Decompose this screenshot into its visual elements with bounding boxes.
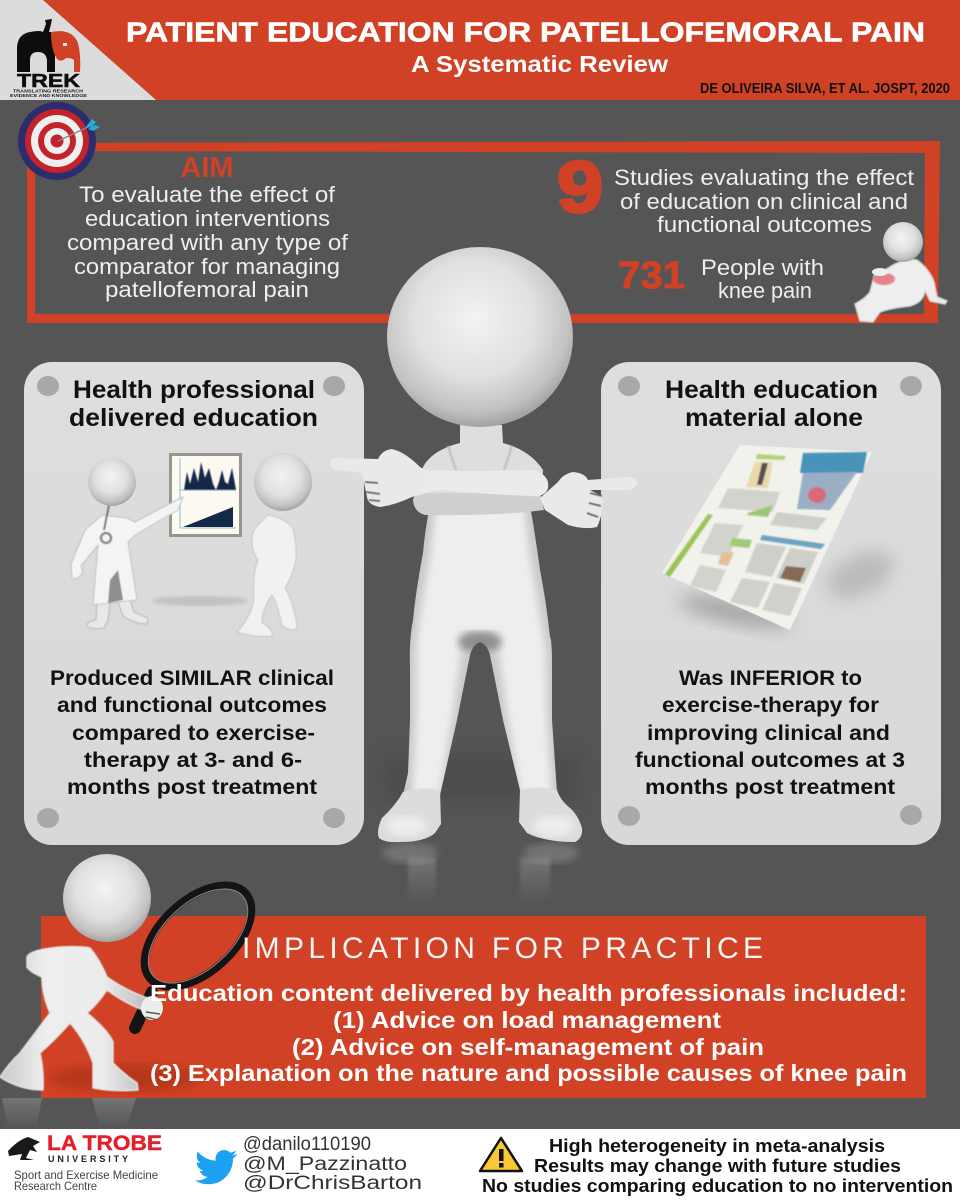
- patient: [237, 453, 312, 636]
- panel body text: therapy at 3- and 6-: [84, 749, 302, 772]
- floor shadow and reflection: [382, 755, 580, 902]
- right pointing hand: [540, 472, 637, 528]
- logo: TREK elephant: TREK: [17, 71, 80, 91]
- reflection: [2, 1098, 136, 1128]
- panel text: (2) Advice on self-management of pain: [292, 1034, 764, 1060]
- panel body text: [635, 667, 905, 799]
- caveats text: Results may change with future studies: [534, 1156, 901, 1176]
- logo: La Trobe University: UNIVERSITY: [48, 1154, 128, 1164]
- logo: La Trobe University: LA TROBE: [47, 1132, 162, 1155]
- legs and torso: [403, 505, 557, 795]
- stat: 731 people: [618, 255, 824, 303]
- subtitle: A Systematic Review: [411, 51, 668, 77]
- panel heading: [665, 376, 878, 432]
- title: PATIENT EDUCATION FOR PATELLOFEMORAL PAIN: [126, 16, 925, 48]
- crossed arms: [413, 470, 548, 515]
- caveats text: [482, 1136, 953, 1196]
- aim text: patellofemoral pain: [105, 277, 309, 302]
- illustration: patient education leaflet: [662, 445, 901, 635]
- panel body text: Was INFERIOR to: [679, 667, 862, 690]
- stat: 731 people: 731: [618, 255, 685, 297]
- magnifying glass: [126, 866, 270, 1028]
- chart board: [169, 453, 242, 537]
- illustration: doctor presenting chart to patient: [71, 453, 312, 636]
- aim text: compared with any type of: [67, 230, 349, 255]
- panel heading: Health education: [665, 376, 878, 404]
- stat: 9 studies: Studies evaluating the effect: [614, 165, 914, 190]
- stat: 9 studies: functional outcomes: [657, 212, 872, 237]
- panel: aim and study summary: [18, 102, 947, 323]
- panel heading: Health professional: [73, 376, 315, 404]
- panel: health education material alone: [601, 362, 941, 845]
- panel: implication for practice: [0, 854, 926, 1128]
- stat: 731 people: knee pain: [718, 278, 812, 303]
- aim heading: AIM: [180, 152, 234, 184]
- panel body text: months post treatment: [67, 776, 317, 799]
- panel heading: delivered education: [69, 404, 318, 432]
- aim text: To evaluate the effect of: [79, 182, 336, 207]
- left pointing hand: [330, 449, 430, 507]
- stat: 9 studies: [557, 148, 914, 237]
- panel body text: and functional outcomes: [57, 694, 327, 717]
- logo: TREK elephant: EVIDENCE AND KNOWLEDGE: [10, 93, 87, 98]
- aim text: comparator for managing: [74, 254, 340, 279]
- panel text: (1) Advice on load management: [333, 1007, 721, 1033]
- doctor: [71, 497, 183, 629]
- logo: TREK elephant: TRANSLATING RESEARCH: [13, 88, 83, 94]
- panel: health professional delivered education: [24, 362, 364, 845]
- panel heading: [69, 376, 318, 432]
- figure: [0, 947, 147, 1091]
- panel body text: exercise-therapy for: [662, 694, 879, 717]
- panel heading: IMPLICATION FOR PRACTICE: [242, 932, 763, 965]
- icon: target: [18, 102, 100, 180]
- logo: La Trobe University: [8, 1132, 162, 1193]
- caveats text: High heterogeneity in meta-analysis: [549, 1136, 885, 1156]
- panel text: [150, 980, 907, 1086]
- twitter handles: @DrChrisBarton: [243, 1173, 422, 1194]
- twitter handles: @danilo110190: [243, 1134, 371, 1155]
- central figure pointing both ways: [330, 247, 637, 902]
- panel text: (3) Explanation on the nature and possible causes of knee pain: [150, 1060, 907, 1086]
- stat: 9 studies: of education on clinical and: [620, 189, 908, 214]
- panel body text: Produced SIMILAR clinical: [50, 667, 334, 690]
- icon: seated figure with knee pain: [855, 222, 947, 322]
- icon: warning triangle: [480, 1138, 522, 1171]
- right foot: [519, 788, 582, 842]
- illustration: figure with magnifying glass: [0, 854, 270, 1128]
- stat: 9 studies: 9: [557, 148, 603, 228]
- aim text: [67, 182, 349, 302]
- logo: La Trobe University: Research Centre: [14, 1179, 97, 1193]
- panel text: Education content delivered by health professionals included:: [150, 980, 907, 1006]
- left foot: [378, 788, 441, 842]
- header banner: [0, 0, 960, 100]
- panel heading: material alone: [685, 404, 863, 432]
- panel body text: improving clinical and: [647, 722, 890, 745]
- panel body text: functional outcomes at 3: [635, 749, 905, 772]
- head: [387, 247, 573, 427]
- twitter handles: [243, 1134, 422, 1194]
- icon: twitter bird: [195, 1150, 237, 1184]
- panel body text: months post treatment: [645, 776, 895, 799]
- logo: La Trobe University: Sport and Exercise Medicine: [14, 1168, 158, 1182]
- logo: TREK elephant: [10, 19, 87, 98]
- aim text: education interventions: [85, 206, 330, 231]
- twitter handles: @M_Pazzinatto: [243, 1154, 407, 1175]
- caveats text: No studies comparing education to no intervention: [482, 1176, 953, 1196]
- stat: 731 people: People with: [701, 255, 824, 280]
- footer: [0, 1129, 960, 1200]
- shoulders and neck: [420, 425, 543, 505]
- panel body text: compared to exercise-: [72, 722, 315, 745]
- panel body text: [50, 667, 334, 799]
